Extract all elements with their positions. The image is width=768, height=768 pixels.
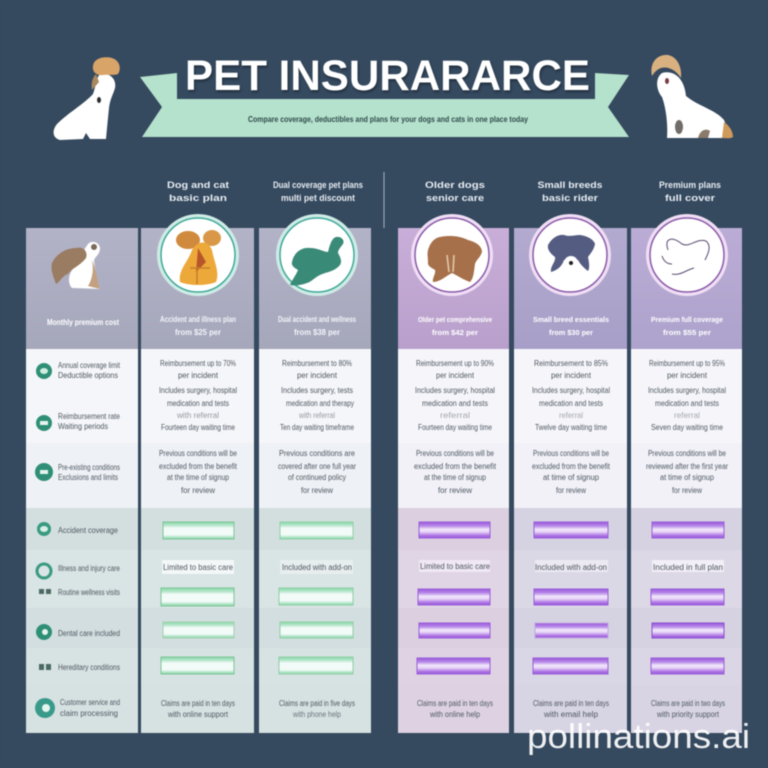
column heading: plan 3: senior care (426, 193, 484, 203)
row icon 8 (39, 664, 51, 670)
panel: plan 1 (141, 214, 254, 733)
badge row (280, 622, 353, 638)
coverage text: Ten day waiting timeframe (280, 423, 354, 432)
column heading: plan 5: Premium plans (659, 180, 721, 190)
row label 4: Accident coverage (58, 526, 118, 535)
row label 3: Exclusions and limits (58, 473, 118, 482)
icon: teal pet in circle (276, 214, 358, 296)
coverage text: medication and therapy (286, 399, 354, 408)
badge row (533, 658, 608, 674)
footer note: Claims are paid in five days (279, 699, 355, 708)
badge row (279, 588, 353, 605)
coverage text: Previous conditions will be (159, 449, 237, 458)
heading: plan 1: Accident and illness plan (160, 315, 236, 324)
coverage text: medication and tests (422, 399, 488, 408)
footer note: with online support (167, 710, 229, 719)
coverage text: Includes surgery, hospital (415, 386, 495, 395)
coverage text: at time of signup (543, 473, 600, 482)
coverage text: Reimbursement up to 95% (649, 359, 725, 368)
coverage text: covered after one full year (278, 462, 356, 471)
panel: plan 2 (259, 214, 371, 733)
row label 3 (58, 463, 120, 482)
coverage text: medication and tests (655, 399, 719, 408)
coverage text: medication and tests (167, 399, 229, 408)
heading: plan 4: from $30 per (549, 328, 593, 337)
column heading: plan 5 (659, 180, 721, 203)
banner ribbon (140, 73, 629, 137)
row icon 1 (36, 363, 52, 379)
coverage text (646, 359, 728, 495)
coverage text (532, 359, 611, 495)
badge row (163, 522, 234, 539)
coverage text: with referral (176, 411, 219, 420)
badge row (535, 623, 608, 638)
row label 1: Deductible options (58, 371, 118, 380)
badge row (161, 588, 234, 606)
heading: plan 5 (651, 315, 723, 337)
coverage text: Reimbursement to 80% (282, 359, 352, 368)
coverage text: per incident (551, 371, 592, 380)
footer note (651, 699, 725, 719)
badge row (161, 657, 234, 674)
coverage text: referral (440, 411, 470, 420)
heading: plan 5: Premium full coverage (651, 315, 723, 324)
row label 3: Pre-existing conditions (58, 463, 120, 472)
footer note: with online help (429, 710, 480, 719)
badge text row: Included with add-on (282, 563, 352, 572)
row label 2: Reimbursement rate (58, 412, 120, 421)
coverage text: Fourteen day waiting time (418, 423, 492, 432)
coverage text: per incident (178, 371, 219, 380)
coverage text: per incident (297, 371, 338, 380)
coverage text: for review (438, 486, 472, 495)
coverage text: excluded from the benefit (414, 462, 497, 471)
heading: plan 2: Dual accident and wellness (278, 315, 356, 324)
coverage text: at time of signup (660, 473, 715, 482)
coverage text: of continued policy (288, 473, 346, 482)
row icon 2 (36, 415, 52, 431)
heading: plan 4 (533, 315, 609, 337)
coverage text: Reimbursement up to 70% (160, 359, 236, 368)
column heading: plan 1 (167, 180, 229, 203)
coverage text: Previous conditions are (279, 449, 356, 458)
badge row (652, 623, 724, 638)
coverage text: medication and tests (539, 399, 603, 408)
column heading: plan 3 (425, 180, 485, 203)
panel: row labels (26, 228, 138, 733)
row label 5: Illness and injury care (58, 564, 120, 573)
coverage text: Includes surgery, tests (281, 386, 353, 395)
row label 1: Annual coverage limit (58, 361, 121, 370)
badge row (418, 589, 490, 605)
row label 2: Waiting periods (58, 422, 108, 431)
row icon 4 (37, 522, 51, 536)
coverage text: Reimbursement up to 90% (416, 359, 494, 368)
column heading: plan 4 (538, 180, 602, 203)
column heading: plan 1: Dog and cat (167, 180, 229, 190)
coverage text: at the time of signup (424, 473, 486, 482)
badge row (417, 658, 490, 674)
heading: plan 4: Small breed essentials (533, 315, 609, 324)
coverage text: Includes surgery, hospital (648, 386, 726, 395)
badge text row: Limited to basic care (420, 562, 491, 571)
column heading: plan 2 (273, 180, 363, 203)
row label 2 (58, 412, 120, 431)
footer note (161, 699, 235, 719)
coverage text (414, 359, 497, 495)
icon: brown pet in circle (411, 214, 493, 296)
footer note: Claims are paid in ten days (533, 699, 609, 708)
footer note: Claims are paid in two days (651, 699, 725, 708)
column heading: plan 2: multi pet discount (281, 193, 355, 203)
footer note: with email help (543, 710, 599, 719)
heading: plan 5: from $55 per (663, 328, 711, 337)
badge row (419, 623, 490, 638)
column heading: plan 4: basic rider (542, 193, 599, 203)
coverage text: reviewed after the first year (646, 462, 728, 471)
row label 8: Hereditary conditions (58, 663, 120, 672)
column heading: plan 4: Small breeds (538, 180, 602, 190)
coverage text: per incident (667, 371, 708, 380)
badge row (651, 658, 724, 674)
footer note: Claims are paid in ten days (161, 699, 235, 708)
footer note: with priority support (656, 710, 720, 719)
coverage text (159, 359, 238, 495)
coverage text: Seven day waiting time (651, 423, 723, 432)
row icon 5 (37, 564, 51, 578)
row label 1 (58, 361, 121, 380)
badge row (651, 589, 724, 605)
column heading: plan 3: Older dogs (425, 180, 485, 190)
column heading: plan 5: full cover (665, 193, 716, 203)
heading: plan 2 (278, 315, 356, 337)
icon: navy pet in circle (529, 214, 611, 296)
coverage text: excluded from the benefit (532, 462, 611, 471)
badge row (419, 522, 490, 538)
panel: plan 4 (514, 214, 627, 733)
coverage text: for review (556, 486, 586, 495)
panel: plan 5 (631, 214, 742, 733)
coverage text: for review (672, 486, 702, 495)
row label 9: claim processing (60, 709, 118, 718)
row label 9: Customer service and (60, 698, 120, 707)
footer note (533, 699, 609, 719)
row icon 9 (35, 698, 55, 718)
coverage text: referral (674, 411, 700, 420)
badge row (534, 589, 608, 605)
coverage text: excluded from the benefit (159, 462, 238, 471)
row label 7: Dental care included (58, 629, 120, 638)
coverage text: Previous conditions will be (648, 449, 726, 458)
badge row (279, 657, 353, 674)
icon: outline pet in circle (646, 214, 728, 296)
coverage text: Includes surgery, hospital (159, 386, 237, 395)
row icon 6 (39, 589, 51, 594)
divider (383, 172, 385, 228)
column heading: plan 1: basic plan (169, 193, 227, 203)
heading: plan 1: from $25 per (175, 328, 221, 337)
badge text row: Included in full plan (653, 563, 723, 572)
panel: plan 3 (398, 214, 509, 733)
column heading: plan 2: Dual coverage pet plans (273, 180, 363, 190)
coverage text: for review (181, 486, 215, 495)
icon: right dog (651, 55, 733, 138)
heading: plan 3 (418, 315, 492, 337)
row label 6: Routine wellness visits (58, 588, 120, 597)
badge text row: Limited to basic care (163, 563, 234, 572)
label: header: Monthly premium cost (47, 318, 119, 327)
coverage text (278, 359, 356, 495)
heading: plan 3: Older pet comprehensive (418, 315, 492, 324)
row icon 7 (36, 624, 52, 640)
heading: plan 3: from $42 per (432, 328, 478, 337)
title: PET INSURARARCE (185, 52, 590, 100)
coverage text: Previous conditions will be (416, 449, 494, 458)
subtitle: Compare coverage, deductibles and plans for your dogs and cats in one place today (248, 115, 528, 124)
coverage text: Reimbursement to 85% (534, 359, 608, 368)
heading: plan 1 (160, 315, 236, 337)
coverage text: Previous conditions will be (533, 449, 609, 458)
heading: plan 2: from $38 per (294, 328, 340, 337)
footer note (417, 699, 493, 719)
badge text row (280, 560, 353, 574)
row icon 3 (35, 463, 53, 481)
icon: left dog (54, 57, 120, 140)
coverage text: per incident (436, 371, 475, 380)
coverage text: at the time of signup (167, 473, 229, 482)
row label 9 (60, 698, 120, 718)
coverage text: Includes surgery, hospital (532, 386, 610, 395)
coverage text: with referral (298, 411, 335, 420)
footer note: Claims are paid in ten days (417, 699, 493, 708)
footer note (279, 699, 355, 719)
icon: orange pets in circle (157, 214, 239, 296)
badge row (163, 622, 234, 638)
badge row (534, 522, 608, 538)
badge row (280, 522, 353, 539)
badge text row (162, 560, 234, 574)
badge text row: Included with add-on (535, 563, 607, 572)
coverage text: Fourteen day waiting time (161, 423, 235, 432)
coverage text: referral (559, 411, 583, 420)
icon: brown and white dog (51, 242, 100, 289)
badge row (652, 522, 724, 538)
footer note: with phone help (292, 710, 341, 719)
watermark: pollinations.ai (527, 718, 750, 756)
coverage text: for review (301, 486, 333, 495)
coverage text: Twelve day waiting time (535, 423, 607, 432)
